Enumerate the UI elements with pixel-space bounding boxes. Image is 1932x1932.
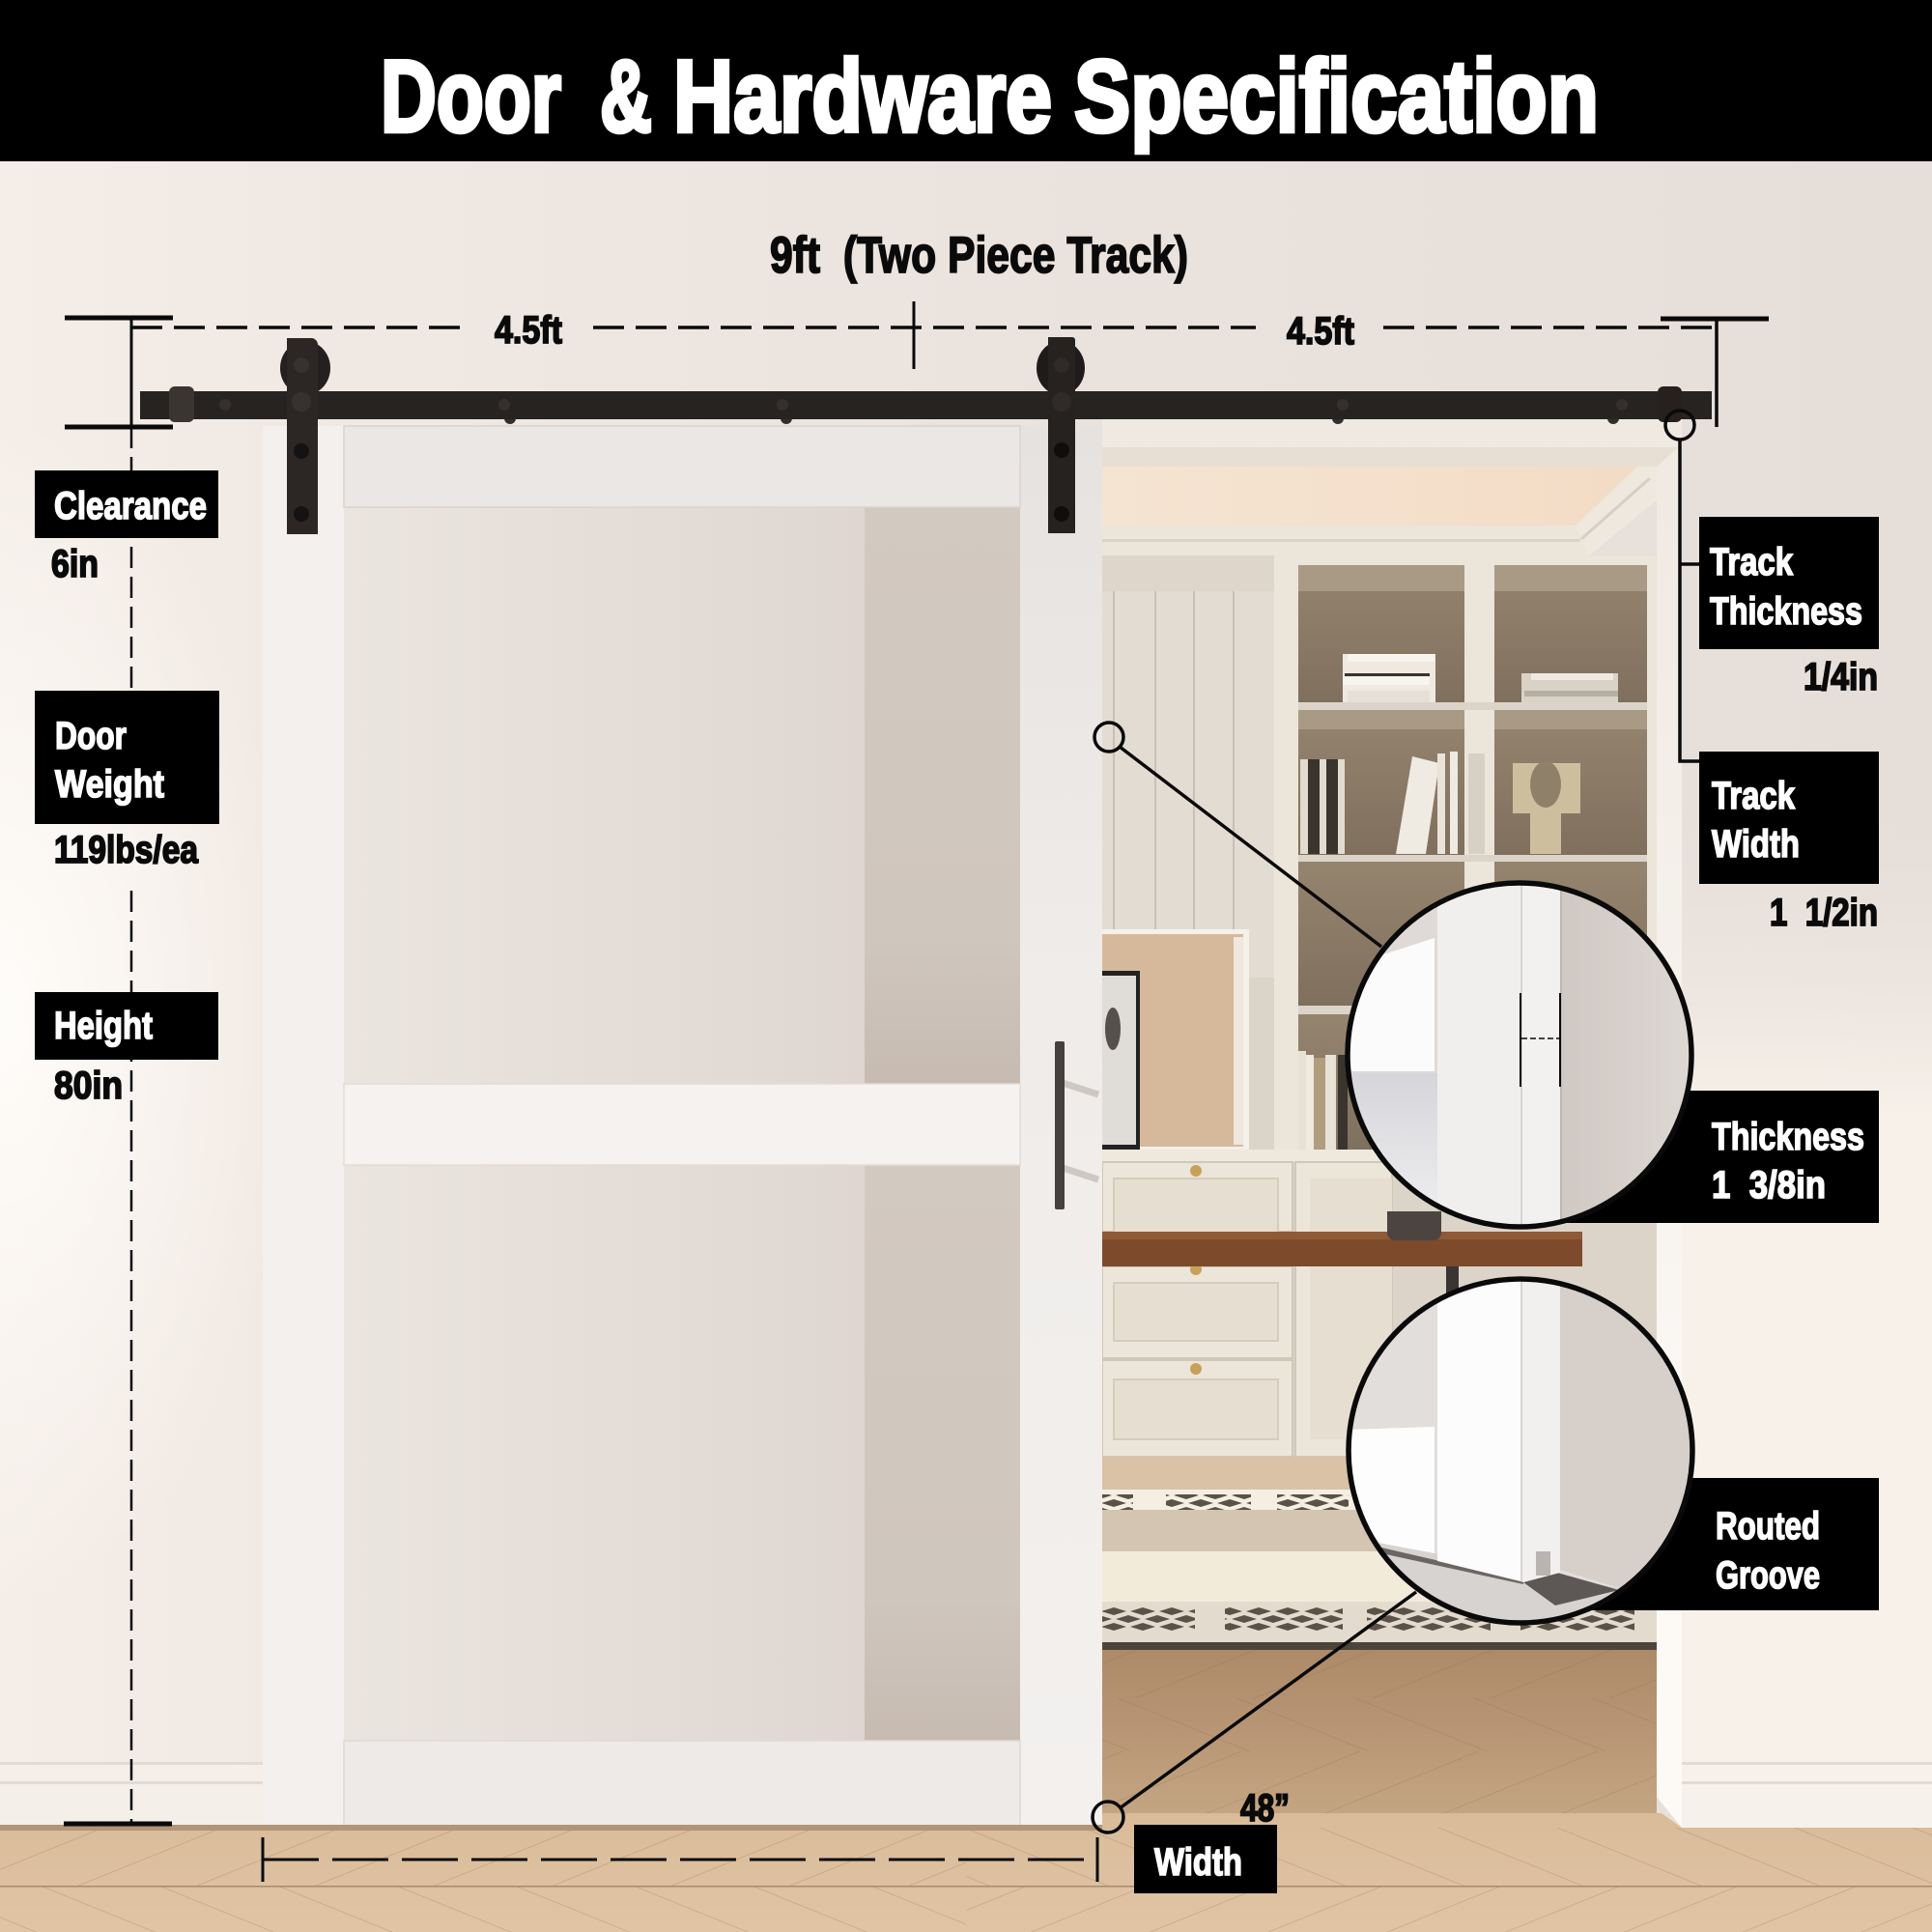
cabinet drawers xyxy=(1102,1150,1657,1457)
table xyxy=(1102,1232,1582,1295)
callout: width: Width xyxy=(1154,1841,1242,1884)
title banner xyxy=(0,0,1932,161)
room seen through opening xyxy=(1102,419,1682,1828)
callout: track width xyxy=(1699,752,1879,934)
label: left half: 4.5ft xyxy=(495,309,562,352)
callout: door weight xyxy=(35,691,219,871)
callout: track width: Track xyxy=(1712,775,1796,817)
middle rail xyxy=(344,1084,1020,1165)
callout: clearance xyxy=(35,470,218,585)
callout: height: Height xyxy=(54,1005,153,1047)
label: right half: 4.5ft xyxy=(1287,310,1354,353)
ceiling soffit xyxy=(1102,447,1678,467)
books and ornaments xyxy=(1300,654,1618,854)
bottom rail xyxy=(344,1741,1020,1827)
callout: door weight: Door xyxy=(55,715,127,757)
callout: width xyxy=(1134,1787,1290,1893)
callout: thickness: 1 3/8in xyxy=(1712,1164,1826,1207)
height and clearance dimension line xyxy=(64,318,173,1824)
magnifier: door thickness xyxy=(1348,883,1691,1228)
magnifier: routed groove xyxy=(1348,1277,1693,1633)
left stile xyxy=(263,426,344,1827)
right hanger xyxy=(1037,337,1085,533)
callout: track thickness: Thickness xyxy=(1710,590,1862,633)
door handle xyxy=(1055,1041,1099,1209)
door xyxy=(263,426,1102,1827)
width leader xyxy=(1093,1592,1416,1833)
callout: door weight: 119lbs/ea xyxy=(54,829,199,871)
callout: thickness: Thickness xyxy=(1712,1116,1864,1158)
title: Door xyxy=(381,40,561,154)
upper glass panel xyxy=(344,507,1020,1084)
jamb white return xyxy=(1657,1449,1682,1828)
cup xyxy=(1387,1211,1441,1240)
thickness marks xyxy=(1520,993,1560,1087)
door casing xyxy=(1102,419,1682,1828)
crown moulding xyxy=(1102,467,1657,555)
title: Hardware xyxy=(673,40,1052,154)
callout: clearance: Clearance xyxy=(54,485,207,527)
title: Specification xyxy=(1074,40,1599,154)
callout: routed groove: Groove xyxy=(1716,1554,1820,1597)
callout: door weight: Weight xyxy=(55,763,164,806)
lit ceiling cove xyxy=(1102,467,1637,526)
callout: track thickness: Track xyxy=(1710,541,1794,583)
callout: routed groove: Routed xyxy=(1716,1505,1820,1548)
top rail xyxy=(344,426,1020,507)
front floor xyxy=(0,1813,1932,1932)
callout: width: 48” xyxy=(1240,1787,1290,1830)
track rail xyxy=(140,386,1712,424)
total track length label: 9ft (Two Piece Track) xyxy=(770,227,1188,284)
callout: thickness xyxy=(1546,1091,1879,1223)
callout: track thickness xyxy=(1699,517,1879,698)
beadboard wall xyxy=(1102,555,1274,978)
right stile xyxy=(1020,426,1102,1827)
callout: height: 80in xyxy=(54,1065,123,1107)
left hanger xyxy=(280,338,330,534)
room floor and rug xyxy=(1102,1457,1657,1814)
framed art xyxy=(1102,929,1249,1150)
callout: clearance: 6in xyxy=(51,543,99,585)
callout: track width: 1 1/2in xyxy=(1770,892,1878,934)
books beside art xyxy=(1298,1051,1348,1150)
callout: track thickness: 1/4in xyxy=(1804,656,1878,698)
callout: track width: Width xyxy=(1712,823,1800,866)
thickness leader xyxy=(1094,723,1381,947)
track leader lines xyxy=(1665,411,1699,761)
callout: routed groove xyxy=(1565,1478,1879,1610)
bookcase xyxy=(1274,555,1657,1159)
skirting boards xyxy=(0,1762,1932,1828)
room back wall xyxy=(1102,555,1657,1521)
lower glass panel xyxy=(344,1165,1020,1741)
door bottom shadow xyxy=(0,1825,1102,1831)
door width dimension xyxy=(263,1837,1097,1882)
title: & xyxy=(600,40,652,154)
callout: height xyxy=(35,992,218,1107)
title xyxy=(381,40,1599,154)
